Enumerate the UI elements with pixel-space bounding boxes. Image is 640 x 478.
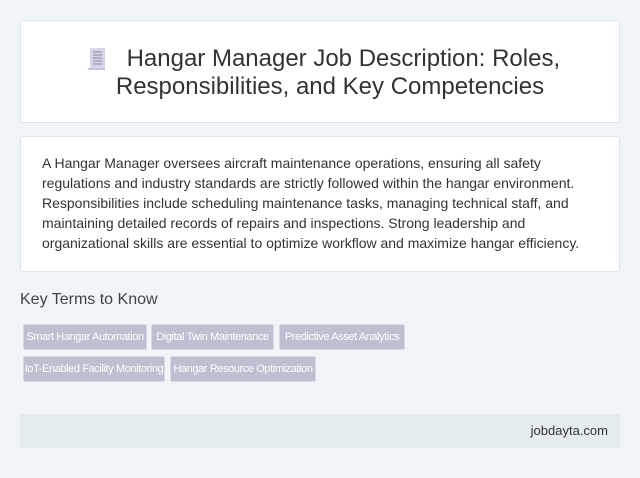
tags: Smart Hangar Automation xyxy=(26,331,144,343)
title xyxy=(116,45,560,100)
tags: Digital Twin Maintenance xyxy=(156,331,269,343)
title: Hangar Manager Job Description: Roles, xyxy=(127,45,560,72)
tags: Hangar Resource Optimization xyxy=(173,363,313,375)
icon: document xyxy=(87,48,105,70)
footer xyxy=(20,414,620,448)
heading: key terms: Key Terms to Know xyxy=(20,291,158,308)
tags: IoT-Enabled Facility Monitoring xyxy=(25,363,163,375)
description card xyxy=(20,136,620,272)
header card xyxy=(20,20,620,123)
title: Responsibilities, and Key Competencies xyxy=(116,73,544,100)
tags: Predictive Asset Analytics xyxy=(285,331,399,343)
description text: A Hangar Manager oversees aircraft maintenance operations, ensuring all safety regulations and industry standards are strictly followed within the hangar environment. Responsibilities include scheduling maintenance tasks, managing technical staff, and maintaining detailed records of repairs and inspections. Strong leadership and organizational skills are essential to optimize workflow and maximize hangar efficiency. xyxy=(42,155,579,251)
footer text: jobdayta.com xyxy=(531,423,608,438)
